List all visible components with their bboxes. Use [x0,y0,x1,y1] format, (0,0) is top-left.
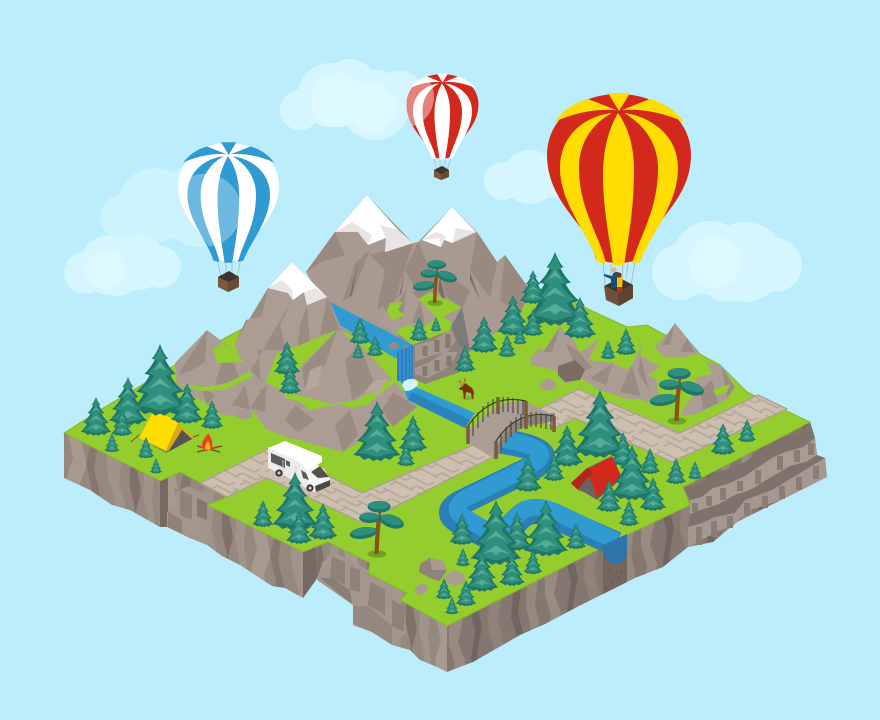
right rock [680,362,735,416]
tree [666,458,686,484]
central forest [353,401,427,466]
stone road [200,389,787,523]
camper van [268,441,330,492]
yellow tent [131,408,199,453]
mountain: left peak [235,262,350,420]
tree [640,477,666,511]
cloud: right [652,221,802,302]
balloon: red and white [406,74,478,180]
tree [600,340,616,359]
stone bridge [468,397,555,459]
tree [573,390,627,458]
tree [497,295,529,336]
tree [498,334,516,357]
lower river [400,379,627,564]
rock wall [413,307,470,384]
tree [109,377,147,426]
illustration: floating island scene [63,59,827,672]
cliff corner shade: left [160,477,168,527]
tree [513,327,527,344]
tree [81,397,111,436]
tree [111,409,133,436]
rock band [530,327,660,407]
body side [268,447,316,490]
small mountain [380,288,437,333]
grass top of island [64,290,810,626]
twisted pine: right ridge [649,368,706,425]
foothill grass patch [265,330,393,402]
tree [436,578,452,599]
tree [367,335,383,356]
mountain facets [306,232,530,340]
tree [526,252,584,326]
bumper [315,480,330,492]
winding channel dark bank [451,441,616,544]
clouds [64,59,802,302]
envelope [547,93,691,265]
tree [520,270,546,304]
tree [279,365,301,394]
tree [615,328,637,355]
top lump [655,323,700,358]
tree [499,553,525,586]
tree [710,423,736,455]
tree [399,415,427,452]
twisted pine: on plateau [412,260,458,306]
tree [543,454,565,481]
mountain: left foothill [175,330,263,417]
windshield [311,466,329,478]
basket [434,166,449,180]
waterfall [397,345,413,381]
snow: peak A [335,195,413,252]
tree [524,550,542,574]
rock: front small [415,583,428,595]
tree [397,443,415,466]
right forest and red tent [514,390,756,526]
left forest [81,344,223,474]
snow: peak B [422,207,476,247]
tree [610,445,654,500]
tree [524,500,568,556]
cloud: left lower [64,234,181,296]
cab front [307,464,330,492]
tree [454,345,476,372]
balloon: blue and white [168,142,279,292]
rock steps: lower notch 2 [353,574,407,645]
tree [252,500,274,527]
tree [551,425,583,467]
tree [445,597,459,614]
plateau grass [390,292,462,345]
river below waterfall [400,380,475,428]
boulders in the upper river [389,342,408,350]
tree [470,316,498,353]
ropes [217,258,241,278]
passengers [604,267,623,293]
tree [640,448,660,474]
forest behind and around mountains [274,252,637,394]
cloud: top centre [280,59,424,140]
tree [352,343,364,359]
mountain: central peaks [306,195,530,352]
tree [353,401,401,461]
front railing [496,412,554,459]
foothill body [250,330,417,452]
tree [502,512,532,551]
rock: front middle [445,570,465,586]
tree [522,309,544,336]
twisted pine: front left [349,501,406,558]
road: left section [200,445,493,523]
cliff corner shade: mid [303,547,316,598]
rock: near right ridge [540,378,556,391]
basket [604,285,633,306]
rock band facets [543,327,650,396]
ropes [434,158,451,170]
tree [619,500,639,526]
rock steps: lower notch 1 [317,552,368,605]
roadside forest [252,472,337,544]
balloon: red and yellow with passengers [547,93,691,306]
cloud: behind big balloon left [484,150,588,204]
tree [564,297,596,339]
tree [514,456,542,492]
cliff: right face [447,422,827,672]
green patch on right rock [713,384,730,396]
deck [470,401,553,458]
tree [150,458,162,474]
dark boulder [558,360,585,382]
tree [471,500,521,565]
tree [738,419,756,442]
envelope [168,142,279,263]
tree [566,523,586,549]
tree [132,344,188,416]
back railing [468,397,526,444]
winding channel light water [457,439,616,541]
river outlet spilling over cliff [603,534,627,564]
tree [286,511,312,544]
tree [272,472,318,530]
arch underside [497,413,555,458]
rock: near foothill [237,408,252,420]
rock steps: right notch [683,422,827,547]
tree [349,317,371,344]
snow: peak C [268,262,327,305]
tree [449,513,475,545]
mountain: central foothill [250,330,417,452]
rocks [237,378,556,595]
roof and cab [268,441,322,471]
left peak facets [235,288,340,395]
tree [610,432,636,466]
deer [458,378,475,400]
basket back [604,278,633,293]
dirt section under river outlet [603,535,627,594]
rock steps: left notch [167,486,207,545]
water foam [402,379,418,391]
wheels [275,469,283,477]
door line [283,460,296,478]
tree [688,461,702,479]
basket [218,271,239,292]
tree [456,580,476,606]
plateau with small mountain and rock wall [380,288,470,384]
tree [596,480,622,512]
tree [430,317,442,332]
upper river [330,302,413,358]
mountain: right low ridge [530,323,735,416]
mountains: snow capped range [235,195,530,420]
tree [201,400,223,429]
ropes [603,262,635,285]
road: right section [530,389,787,462]
cloud: left upper [100,163,247,247]
side windows [271,453,309,480]
tree [456,548,470,566]
tree [466,550,498,592]
tree [138,437,154,458]
cliff: left face [64,433,447,672]
rock: big front [419,558,447,581]
envelope [406,74,478,160]
tree [274,341,300,375]
front forest [436,500,586,614]
tree [171,383,203,424]
island cliffs [64,422,827,672]
tree [410,317,428,341]
tree [309,503,337,540]
tree [104,433,120,452]
red tent [571,456,622,500]
campfire [197,433,222,452]
